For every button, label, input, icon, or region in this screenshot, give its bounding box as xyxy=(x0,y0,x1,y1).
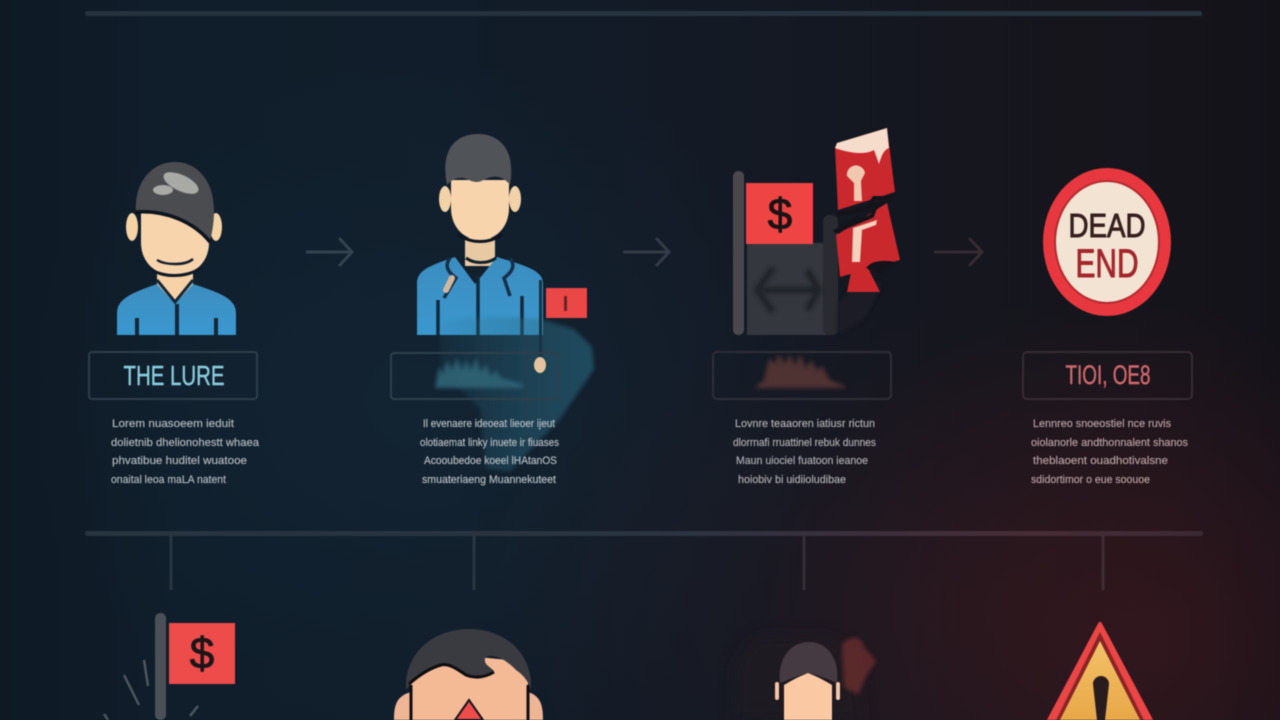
icon: bottom warning triangle xyxy=(1047,624,1153,720)
label box: the lure: THE LURE xyxy=(124,360,224,391)
icon: person with cap xyxy=(117,162,236,335)
icon: flag, sign and torn red paper xyxy=(733,128,900,335)
text block: step 1 description: onaital leoa maLA natent xyxy=(111,474,226,486)
text block: step 4 description: sdidortimor o eue soouoe xyxy=(1031,474,1150,486)
text block: step 4 description: Lennreo snoeostiel nce ruvis xyxy=(1033,418,1171,430)
icon: bottom shocked face xyxy=(394,629,543,720)
text block: step 3 description: dlorrnafi rruattinel rebuk dunnes xyxy=(733,437,876,449)
icon: dead end sign: END xyxy=(1076,242,1138,286)
panel: step 1 the lure xyxy=(89,162,260,486)
text block: step 1 description: Lorem nuasoeem ieduit xyxy=(112,418,234,430)
label box: step 2 xyxy=(391,353,559,399)
icon: bottom flag with dollar sign xyxy=(104,613,235,720)
icon: dead end sign xyxy=(1043,168,1171,316)
label box: step 4: TIOI, OE8 xyxy=(1066,360,1150,390)
label box: the lure xyxy=(89,352,257,399)
icon: flag, sign and torn red paper: $ xyxy=(768,190,792,239)
text block: step 1 description xyxy=(111,418,260,486)
text block: step 3 description: Maun uiociel fuatoon ieanoe xyxy=(736,455,868,467)
text block: step 4 description xyxy=(1031,418,1188,486)
text block: step 2 description: Il evenaere ideoeat lieoer ijeut xyxy=(423,418,555,430)
icon: bottom faded person with smoke xyxy=(735,635,876,720)
panel: step 3 xyxy=(713,128,900,486)
text block: step 2 description: Acooubedoe koeel lHAtanOS xyxy=(424,455,557,467)
icon: person in suit with flag xyxy=(417,134,594,471)
panel: step 2 xyxy=(391,134,594,486)
text block: step 2 description xyxy=(420,418,559,486)
top divider line xyxy=(85,11,1202,16)
text block: step 4 description: theblaoent ouadhotivalsne xyxy=(1033,455,1168,467)
text block: step 4 description: oiolanorle andthonnalent shanos xyxy=(1031,437,1188,449)
arrow: step 1 to 2 xyxy=(306,238,352,266)
smear: teal wash xyxy=(440,317,594,471)
icon: dead end sign: DEAD xyxy=(1068,207,1146,244)
lower divider with connectors xyxy=(85,531,1203,590)
text block: step 3 description: hoiobiv bi uidiioludibae xyxy=(738,474,846,486)
arrow: step 3 to 4 xyxy=(934,238,982,266)
label box: step 3 xyxy=(713,352,891,399)
text block: step 2 description: olotiaemat linky inuete ir fiuases xyxy=(420,437,559,449)
panel: step 4 dead end xyxy=(1023,168,1192,486)
text block: step 2 description: smuateriaeng Muannekuteet xyxy=(422,474,556,486)
label box: step 4 xyxy=(1023,352,1192,399)
text block: step 3 description: Lovnre teaaoren iatiusr rictun xyxy=(735,418,875,430)
text block: step 3 description xyxy=(733,418,876,486)
text block: step 1 description: dolietnib dhelionohestt whaea xyxy=(111,437,260,449)
arrow: step 2 to 3 xyxy=(623,238,669,266)
text block: step 1 description: phvatibue huditel wuatooe xyxy=(112,455,247,467)
icon: bottom flag with dollar sign: $ xyxy=(190,629,214,678)
